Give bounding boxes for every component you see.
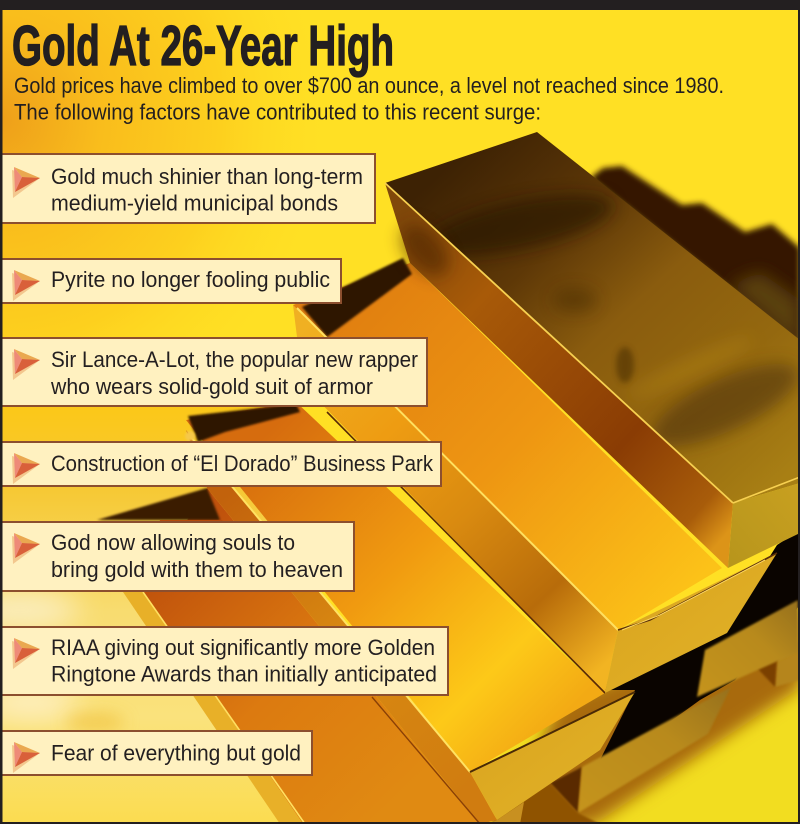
arrow icon	[12, 453, 40, 484]
factor 1: medium-yield municipal bonds	[51, 190, 338, 216]
factor 6: RIAA giving out significantly more Golden	[51, 635, 435, 660]
intro text: Gold prices have climbed to over $700 an ounce, a level not reached since 1980.	[14, 73, 724, 98]
intro text	[14, 73, 724, 124]
intro text: The following factors have contributed to this recent surge:	[14, 100, 541, 124]
bar 2 side	[293, 305, 618, 693]
factor 1: Gold much shinier than long-term	[51, 164, 363, 189]
factor 7: Fear of everything but gold	[51, 740, 301, 766]
arrow icon	[12, 533, 40, 564]
photo: stacked gold bars	[97, 132, 800, 824]
top bar end face	[728, 483, 800, 568]
factor 4: Construction of “El Dorado” Business Park	[51, 451, 434, 476]
factor 3: Sir Lance-A-Lot, the popular new rapper	[51, 347, 418, 372]
factor 3: who wears solid-gold suit of armor	[50, 374, 373, 399]
lower-right shadow on the surface	[500, 610, 800, 824]
bar 3 end face	[470, 692, 635, 820]
bar 3 top face	[186, 402, 605, 772]
arrow icon	[12, 742, 40, 773]
black gap right	[590, 530, 800, 780]
factor 7	[0, 731, 312, 775]
bar 4 (left)	[143, 488, 480, 824]
factor 6	[0, 627, 448, 695]
arrow icon	[12, 349, 40, 380]
arrow icon	[12, 638, 40, 669]
small far-right lower bar	[775, 640, 800, 687]
arrow icon	[12, 270, 40, 301]
factor 6: Ringtone Awards than initially anticipated	[51, 662, 437, 686]
lower bar B	[550, 767, 582, 813]
factor 2	[0, 259, 341, 303]
bar 3 side	[186, 430, 497, 824]
factor 5	[0, 522, 354, 591]
factor 3	[0, 338, 427, 406]
factor 2: Pyrite no longer fooling public	[51, 267, 330, 292]
far dark bars behind top bar	[590, 166, 800, 345]
title: Gold At 26-Year High	[12, 14, 394, 78]
arrow icon	[12, 167, 40, 198]
factor 4	[0, 442, 441, 486]
factor 5: God now allowing souls to	[51, 530, 295, 555]
top bar side face	[385, 183, 733, 568]
top bar top face	[385, 132, 800, 503]
factor 5: bring gold with them to heaven	[51, 557, 343, 582]
bar 2 end face	[605, 553, 777, 693]
bar 2 top face	[293, 263, 722, 630]
factor 1	[0, 154, 375, 223]
lower bar A	[697, 600, 798, 697]
